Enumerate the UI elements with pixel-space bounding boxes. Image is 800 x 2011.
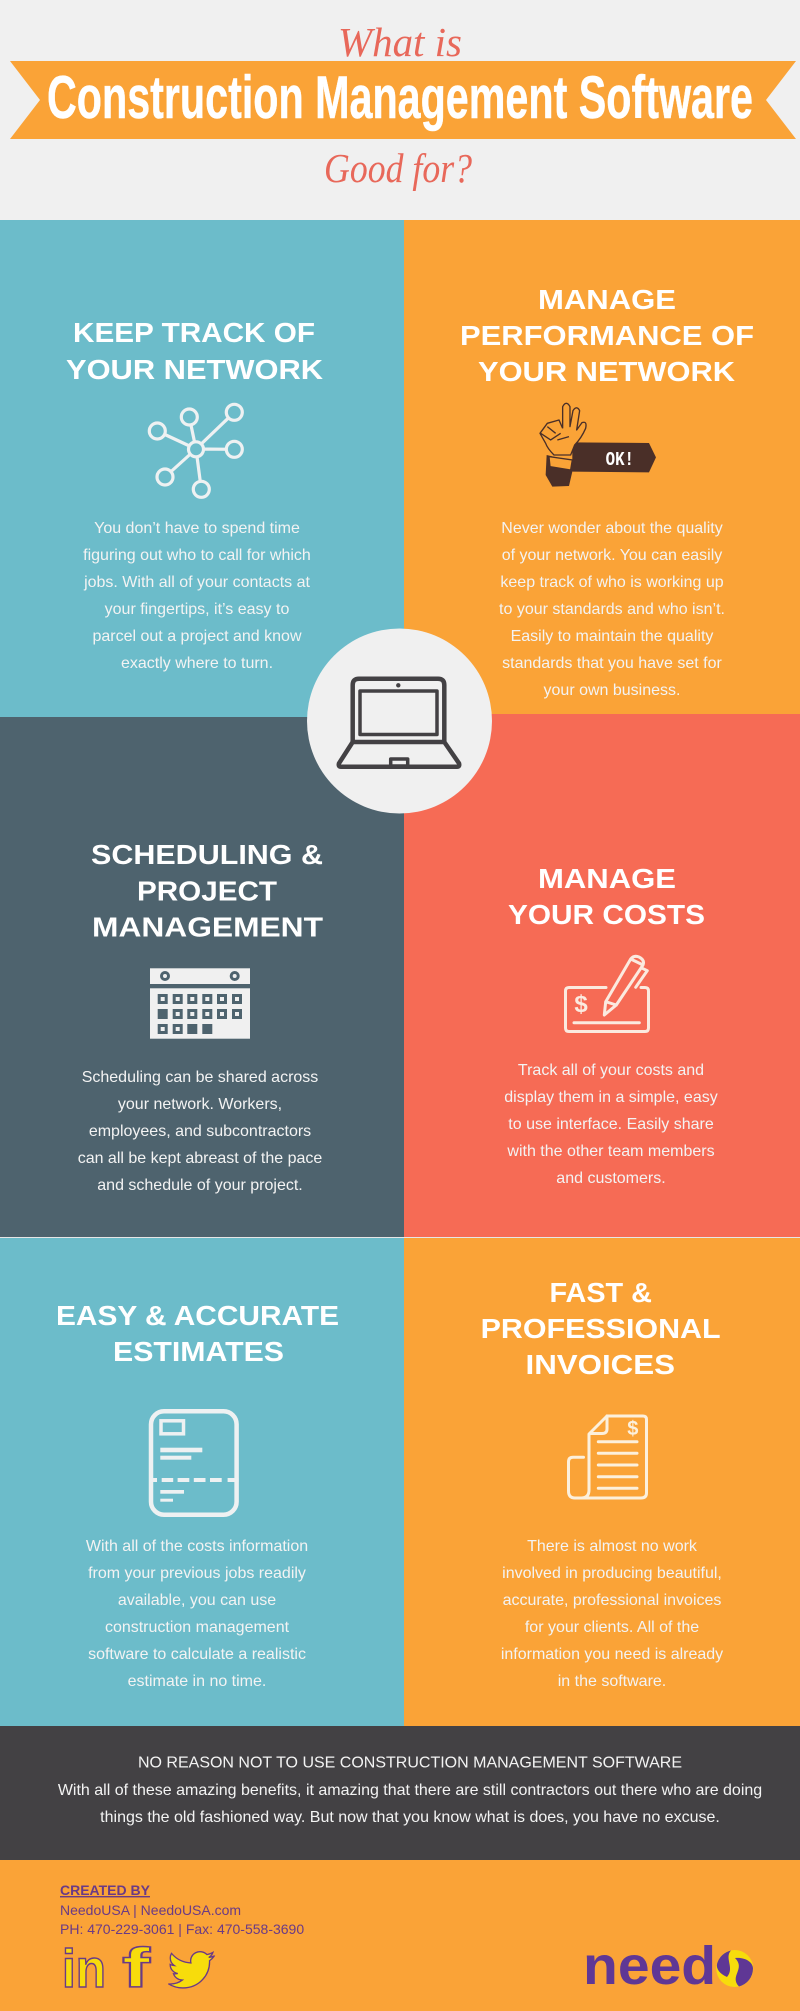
heading: PROFESSIONAL bbox=[481, 1313, 721, 1344]
body text: software to calculate a realistic bbox=[88, 1646, 306, 1663]
heading: PROJECT bbox=[137, 876, 277, 906]
body text: involved in producing beautiful, bbox=[502, 1565, 722, 1582]
title script: What is: What is bbox=[338, 19, 462, 65]
body text: Track all of your costs and bbox=[518, 1062, 704, 1079]
body text: and schedule of your project. bbox=[97, 1177, 303, 1194]
icon: cheque and pen: $ bbox=[574, 991, 588, 1018]
heading bbox=[481, 1277, 721, 1380]
body text bbox=[86, 1538, 308, 1690]
icon: network bbox=[149, 404, 242, 497]
banner ribbon bbox=[10, 61, 796, 139]
body text: jobs. With all of your contacts at bbox=[83, 574, 310, 591]
body text: keep track of who is working up bbox=[500, 574, 724, 591]
heading: PERFORMANCE OF bbox=[460, 320, 754, 351]
heading: MANAGE bbox=[538, 284, 676, 315]
body text: your own business. bbox=[544, 682, 680, 699]
panel: scheduling and project management bbox=[0, 717, 404, 1237]
header bbox=[10, 19, 796, 191]
body text: exactly where to turn. bbox=[121, 655, 273, 672]
body text: Scheduling can be shared across bbox=[82, 1069, 318, 1086]
icon: estimate document bbox=[149, 1411, 239, 1515]
heading: MANAGE bbox=[538, 863, 676, 894]
body text: employees, and subcontractors bbox=[89, 1123, 311, 1140]
heading: FAST & bbox=[550, 1277, 652, 1308]
credits text bbox=[60, 1882, 304, 1937]
body text: in the software. bbox=[558, 1673, 666, 1690]
body text: There is almost no work bbox=[527, 1538, 698, 1555]
heading: EASY & ACCURATE bbox=[56, 1300, 339, 1331]
heading: YOUR COSTS bbox=[508, 899, 705, 930]
heading: YOUR NETWORK bbox=[478, 356, 735, 387]
OK label: OK! bbox=[606, 449, 634, 471]
credits text: CREATED BY bbox=[60, 1882, 151, 1898]
body text: available, you can use bbox=[118, 1592, 276, 1609]
credits text: PH: 470-229-3061 | Fax: 470-558-3690 bbox=[60, 1921, 304, 1937]
panel: fast and professional invoices bbox=[404, 1238, 800, 1726]
panel: easy and accurate estimates bbox=[0, 1238, 404, 1726]
body text: of your network. You can easily bbox=[502, 547, 722, 564]
icon: invoice bbox=[568, 1416, 646, 1498]
center circle with laptop bbox=[307, 628, 492, 814]
body text: accurate, professional invoices bbox=[503, 1592, 721, 1609]
icon: Facebook: f bbox=[122, 1936, 151, 1999]
panel: closing statement bbox=[0, 1726, 800, 1860]
body text: construction management bbox=[105, 1619, 290, 1636]
body text: information you need is already bbox=[501, 1646, 723, 1663]
body text: your network. Workers, bbox=[118, 1096, 282, 1113]
icon: cheque and pen bbox=[566, 956, 648, 1032]
logo: needo: needo bbox=[583, 1936, 751, 1996]
heading bbox=[56, 1300, 339, 1367]
panel: keep track of your network bbox=[0, 220, 404, 717]
body text: With all of the costs information bbox=[86, 1538, 308, 1555]
body text: with the other team members bbox=[506, 1143, 715, 1160]
panel: manage performance bbox=[404, 220, 800, 714]
body text: to use interface. Easily share bbox=[508, 1116, 714, 1133]
body text: your fingertips, it’s easy to bbox=[105, 601, 289, 618]
body text: display them in a simple, easy bbox=[504, 1089, 718, 1106]
panel: closing statement: NO REASON NOT TO USE CONSTRUCTION MANAGEMENT SOFTWARE bbox=[138, 1754, 682, 1772]
body text: and customers. bbox=[556, 1170, 666, 1187]
body text: can all be kept abreast of the pace bbox=[78, 1150, 322, 1167]
body text: figuring out who to call for which bbox=[83, 547, 311, 564]
heading: MANAGEMENT bbox=[92, 912, 323, 942]
body text bbox=[501, 1538, 723, 1690]
body text bbox=[78, 1069, 322, 1194]
body text: estimate in no time. bbox=[128, 1673, 266, 1690]
heading bbox=[91, 839, 323, 942]
body text bbox=[499, 520, 725, 699]
body text: standards that you have set for bbox=[502, 655, 723, 672]
panel: closing statement: With all of these amazing benefits, it amazing that there are still contractors out there who are doing bbox=[58, 1782, 762, 1799]
body text: from your previous jobs readily bbox=[88, 1565, 306, 1582]
body text: You don’t have to spend time bbox=[94, 520, 300, 537]
body text: Never wonder about the quality bbox=[501, 520, 723, 537]
body text: Easily to maintain the quality bbox=[511, 628, 713, 645]
body text: for your clients. All of the bbox=[525, 1619, 699, 1636]
heading: YOUR NETWORK bbox=[66, 354, 323, 385]
heading: KEEP TRACK OF bbox=[73, 317, 315, 348]
body text bbox=[83, 520, 311, 672]
body text: to your standards and who isn’t. bbox=[499, 601, 725, 618]
panel: footer bbox=[0, 1860, 800, 2011]
icon: Twitter bird bbox=[168, 1952, 214, 1988]
credits text: NeedoUSA | NeedoUSA.com bbox=[60, 1902, 241, 1918]
heading bbox=[508, 863, 705, 930]
panel: closing statement: things the old fashioned way. But now that you know what is does, you have no excuse. bbox=[100, 1809, 720, 1826]
heading: ESTIMATES bbox=[113, 1336, 284, 1367]
title script: Good for?: Good for? bbox=[324, 145, 472, 191]
heading bbox=[460, 284, 754, 387]
heading bbox=[66, 317, 323, 385]
heading: SCHEDULING & bbox=[91, 839, 323, 870]
icon: LinkedIn: in bbox=[62, 1939, 106, 1999]
panel: manage your costs bbox=[404, 714, 800, 1237]
icon: laptop bbox=[339, 679, 459, 767]
icon: invoice: $ bbox=[627, 1418, 638, 1440]
body text bbox=[504, 1062, 718, 1187]
heading: INVOICES bbox=[526, 1349, 675, 1380]
icon: calendar bbox=[150, 968, 250, 1039]
icon: OK hand bbox=[540, 403, 656, 487]
body text: parcel out a project and know bbox=[92, 628, 302, 645]
